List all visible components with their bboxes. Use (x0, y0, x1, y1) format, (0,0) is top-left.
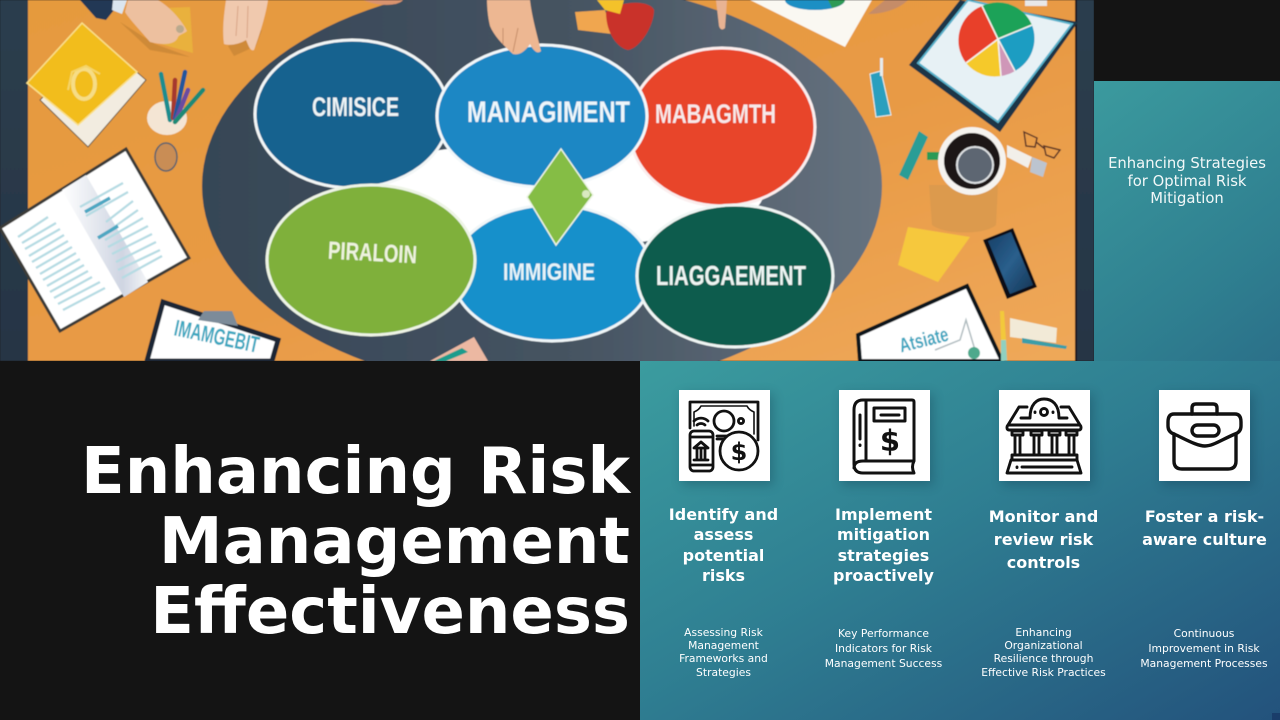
title (81, 434, 632, 648)
heading: foster: aware culture (1142, 530, 1267, 549)
tablet: Atsiate (897, 324, 951, 357)
icon: briefcase (1159, 390, 1250, 481)
heading: monitor: Monitor and (989, 507, 1098, 526)
circle: light blue upper: MANAGIMENT (467, 96, 630, 129)
desk surface (0, 0, 1094, 361)
description: identify: Assessing Risk (684, 626, 763, 639)
heading: implement: Implement (835, 504, 932, 524)
heading: monitor (989, 507, 1098, 572)
title: Enhancing Risk (81, 434, 630, 508)
hand right top (868, 0, 908, 14)
description: monitor (981, 626, 1106, 679)
photo: top-down desk with risk management diagram (0, 0, 1094, 361)
open notebook (0, 149, 189, 331)
pencil cup (147, 72, 203, 171)
heading: foster (1142, 507, 1267, 549)
description: foster: Management Processes (1140, 657, 1268, 670)
title: Management (159, 504, 630, 578)
glasses (1024, 132, 1060, 158)
description: implement: Indicators for Risk (835, 642, 932, 655)
circle: dark blue (255, 40, 449, 188)
heading: implement (833, 504, 934, 585)
erasers (1007, 145, 1047, 177)
heading: monitor: review risk (994, 530, 1093, 549)
hand top centre (487, 0, 541, 54)
subtitle text (1108, 155, 1266, 207)
heading: identify: Identify and (669, 504, 778, 524)
heading: implement: strategies (838, 546, 929, 565)
panel: subtitle (1094, 81, 1280, 361)
clipboard with pie chart (909, 0, 1078, 132)
small hand at bottom (430, 337, 488, 361)
circle: dark blue: CIMISICE (312, 92, 399, 122)
colored paper shapes (575, 0, 654, 50)
description: identify (679, 626, 768, 679)
description: implement: Management Success (825, 657, 942, 670)
phone (983, 228, 1037, 299)
circle: dark green (637, 205, 833, 347)
circle: green: PIRALOIN (327, 237, 418, 269)
left dark strip (0, 0, 28, 361)
icon: banknote phone and coin (679, 390, 770, 481)
description: identify: Frameworks and (679, 652, 768, 665)
circle: red (629, 48, 815, 206)
circle: light blue lower: IMMIGINE (503, 259, 595, 286)
description: identify: Strategies (696, 666, 751, 679)
heading: implement: mitigation (837, 525, 930, 544)
subtitle text: Enhancing Strategies (1108, 155, 1266, 172)
description: implement: Key Performance (838, 627, 929, 640)
bottom clipboard (147, 302, 278, 361)
circle: green (267, 185, 475, 335)
green diamond (527, 149, 593, 245)
hand top small (363, 0, 403, 5)
circle: light blue upper (437, 45, 647, 187)
finger (716, 0, 727, 29)
white centre (333, 143, 763, 247)
description: identify: Management (688, 639, 759, 652)
description: monitor: Resilience through (994, 652, 1093, 665)
icon: dollar book: $ (880, 424, 900, 458)
white paper with blue chart (750, 0, 872, 47)
icon: banknote phone and coin: $ (731, 438, 747, 466)
description: monitor: Effective Risk Practices (981, 666, 1106, 679)
description: implement (825, 627, 942, 670)
description: foster: Improvement in Risk (1148, 642, 1260, 655)
yellow sticky note (898, 227, 970, 282)
tablet (858, 286, 1002, 361)
corner mark (1272, 713, 1280, 720)
subtitle text: Mitigation (1150, 190, 1224, 207)
coffee mug (927, 127, 1006, 232)
heading: identify: risks (702, 566, 745, 585)
hand top left (223, 0, 268, 56)
description: foster (1140, 627, 1268, 670)
dark oval mat (202, 0, 882, 391)
yellow book (27, 23, 146, 147)
description: monitor: Enhancing (1015, 626, 1072, 639)
heading: identify (669, 504, 778, 585)
heading: identify: potential (683, 546, 764, 565)
subtitle text: for Optimal Risk (1128, 173, 1246, 190)
panel: four strategies (640, 361, 1280, 720)
right dark strip (1075, 0, 1094, 361)
description: monitor: Organizational (1004, 639, 1083, 652)
description: foster: Continuous (1174, 627, 1234, 640)
icon: dollar book (839, 390, 930, 481)
sticky note and hand (80, 0, 193, 57)
note and pen (1000, 311, 1067, 361)
heading: foster: Foster a risk- (1145, 507, 1264, 526)
heading: identify: assess (694, 525, 753, 544)
circle: light blue lower (452, 205, 652, 341)
heading: implement: proactively (833, 566, 934, 585)
heading: monitor: controls (1007, 553, 1080, 572)
circle: dark green: LIAGGAEMENT (656, 260, 806, 291)
icon: bank building (999, 390, 1090, 481)
blue pen (870, 58, 891, 117)
circle: red: MABAGMTH (655, 99, 776, 129)
teal marker (899, 131, 928, 180)
title: Effectiveness (150, 574, 630, 648)
